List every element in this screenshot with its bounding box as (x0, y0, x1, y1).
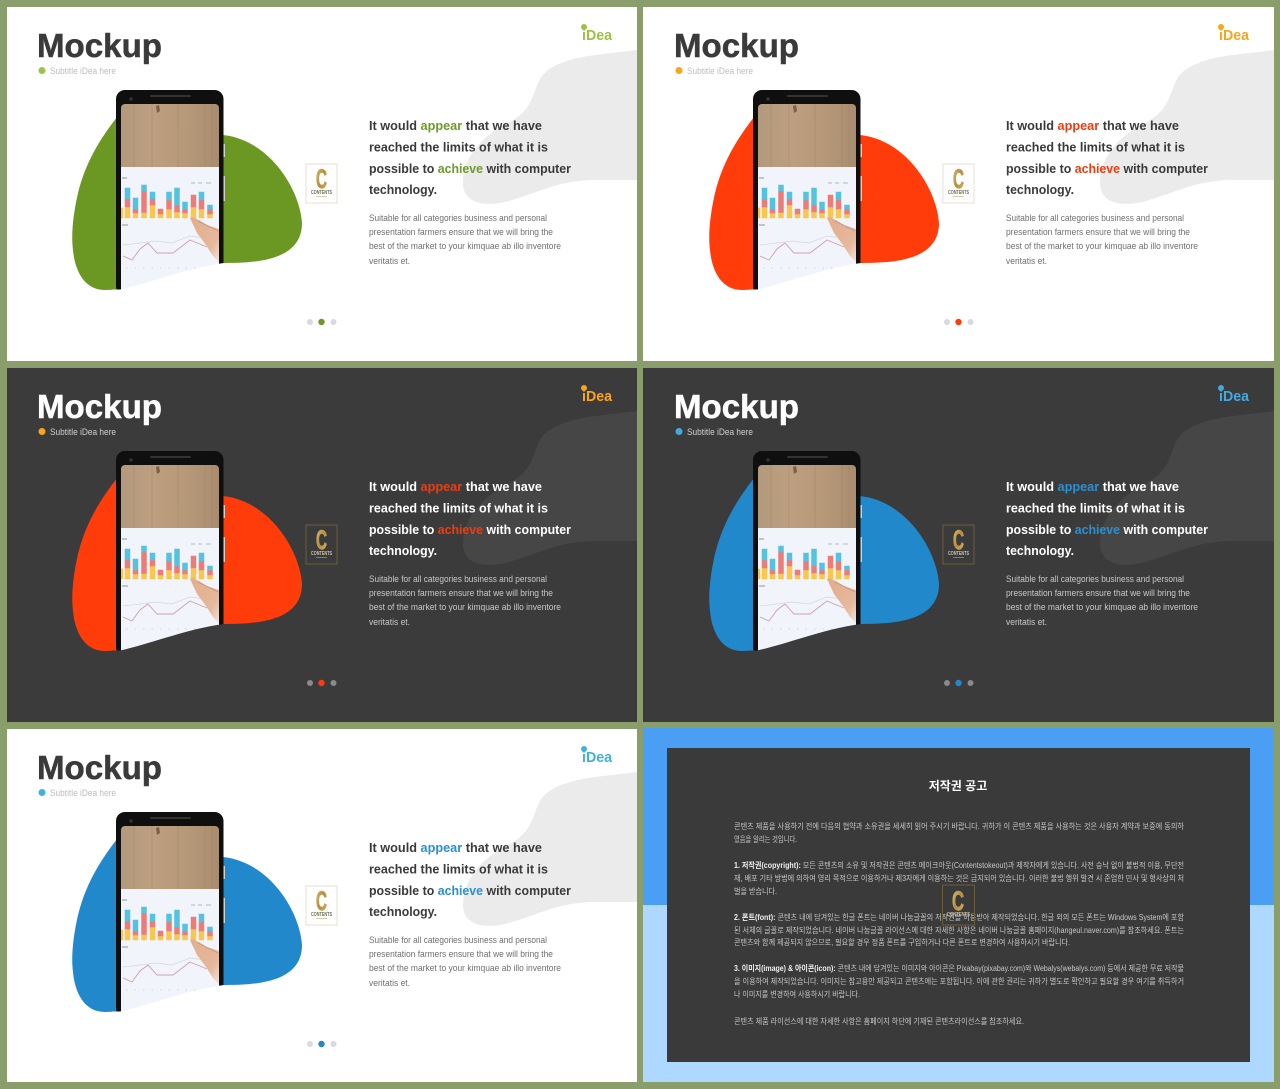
logo: iDea: iDea (1219, 388, 1250, 405)
body text: best of the market to your kimquae ab illo inventore (369, 963, 561, 973)
contents badge: CONTENTS (311, 551, 332, 557)
headline: technology. (369, 182, 437, 197)
contents badge: C (316, 886, 327, 916)
pagination dots (944, 680, 974, 686)
grey background blob (463, 411, 637, 565)
colored blob (72, 117, 302, 290)
notice section 2 font: 된 서체의 글꼴로 제작되었습니다. 네이버 나눔글꼴 라이선스에 대한 자세한 사항은 네이버 나눔글꼴 홈페이지(hangeul.naver.com)를 참조하세요. 폰트는 (734, 925, 1184, 935)
headline: possible to achieve with computer (369, 161, 571, 176)
contents badge watermark: C (952, 886, 964, 916)
headline: It would appear that we have (369, 479, 542, 494)
grey background blob (463, 772, 637, 926)
headline: reached the limits of what it is (369, 140, 548, 154)
body text (369, 213, 561, 266)
notice section 3 image and icon: 3. 이미지(image) & 아이콘(icon): 콘텐츠 내에 담겨있는 이미지와 아이콘은 Pixabay(pixabay.com)와 Webalys(webalys.com) 등에서 제공한 무료 저작물 (734, 963, 1184, 973)
colored blob (709, 478, 939, 651)
grey background blob (463, 50, 637, 204)
pagination dots (944, 319, 974, 325)
colored blob (72, 478, 302, 651)
notice section 2 font: 콘텐츠와 함께 제공되지 않으므로, 필요할 경우 정품 폰트를 구입하거나 다른 폰트로 변경하여 사용하시기 바랍니다. (734, 937, 1070, 947)
pagination dots (307, 680, 336, 686)
dark swoosh (112, 624, 224, 661)
body text: Suitable for all categories business and personal (1006, 574, 1184, 584)
headline: technology. (369, 543, 437, 558)
grey background blob (1100, 50, 1274, 204)
white swoosh (749, 263, 861, 300)
title: Mockup (674, 388, 799, 425)
notice closing line: 콘텐츠 제품 라이선스에 대한 자세한 사항은 홈페이지 하단에 기재된 콘텐츠라이선스를 참조하세요. (734, 1016, 1024, 1026)
headline: It would appear that we have (1006, 479, 1179, 494)
notice section 3 image and icon: 을 이용하여 제작되었습니다. 이미지는 참고용만 제공되고 콘텐츠에는 포함됩니다. 이에 관한 권리는 귀하가 별도로 확인하고 필요할 경우 여기를 취득하거 (734, 976, 1184, 986)
body text: veritatis et. (1006, 256, 1047, 266)
headline: technology. (1006, 543, 1074, 558)
notice section 1 copyright: 재, 배포 기타 방법에 의하여 영리 목적으로 이용하거나 제3자에게 이용하는 것은 금지되어 있습니다. 이러한 불법 행위 발견 시 준엄한 민사 및 형사상의 처 (734, 873, 1184, 883)
body text: Suitable for all categories business and personal (369, 935, 547, 945)
body text: Suitable for all categories business and personal (1006, 213, 1184, 223)
headline (369, 840, 571, 919)
headline: possible to achieve with computer (369, 883, 571, 898)
white swoosh (112, 985, 224, 1022)
notice title: 저작권 공고 (929, 778, 987, 793)
panel: mockup slide, green on white (7, 7, 637, 361)
headline: It would appear that we have (1006, 118, 1179, 133)
headline: reached the limits of what it is (369, 500, 548, 516)
notice section 2 font (734, 912, 1185, 947)
headline: reached the limits of what it is (1006, 140, 1185, 154)
contents badge: CONTENTS (948, 190, 969, 196)
panel: mockup slide, blue on dark (643, 368, 1274, 722)
body text (369, 935, 561, 988)
title: Mockup (37, 749, 162, 786)
contents badge watermark: CONTENTS (947, 912, 970, 918)
logo: iDea: iDea (582, 27, 613, 44)
body text: best of the market to your kimquae ab illo inventore (1006, 602, 1198, 612)
notice section 3 image and icon: 나 이미지를 변경하여 사용하시기 바랍니다. (734, 989, 860, 999)
subtitle: Subtitle iDea here (687, 66, 753, 76)
subtitle: Subtitle iDea here (687, 427, 753, 437)
notice section 1 copyright: 벌을 받습니다. (734, 886, 777, 896)
contents badge watermark (942, 885, 974, 925)
body text (1006, 213, 1198, 266)
contents badge: CONTENTS (311, 190, 332, 196)
body text: veritatis et. (369, 978, 410, 988)
notice section 1 copyright: 1. 저작권(copyright): 모든 콘텐츠의 소유 및 저작권은 콘텐츠 메이크아웃(Contentstokeout)과 제작자에게 있습니다. 사전 승낙 없이 불법적 이용, 무단전 (734, 860, 1184, 870)
headline: It would appear that we have (369, 840, 542, 855)
panel: mockup slide, blue on white (7, 729, 637, 1082)
headline: technology. (1006, 182, 1074, 197)
title: Mockup (37, 27, 162, 64)
notice section 2 font: 2. 폰트(font): 콘텐츠 내에 담겨있는 한글 폰트는 네이버 나눔글꼴의 저작권을 허용받아 제작되었습니다. 한글 외의 모든 폰트는 Windows System에 포함 (734, 912, 1185, 922)
body text: veritatis et. (1006, 617, 1047, 627)
headline (369, 479, 571, 558)
pagination dots (307, 1041, 336, 1047)
grey background blob (1100, 411, 1274, 565)
subtitle: Subtitle iDea here (50, 427, 116, 437)
body text: veritatis et. (369, 617, 410, 627)
body text: presentation farmers ensure that we will bring the (369, 949, 553, 959)
contents badge (943, 164, 974, 203)
title: Mockup (37, 388, 162, 425)
pagination dots (307, 319, 336, 325)
body text: veritatis et. (369, 256, 410, 266)
subtitle: Subtitle iDea here (50, 788, 116, 798)
logo: iDea: iDea (582, 388, 613, 405)
headline: It would appear that we have (369, 118, 542, 133)
headline: technology. (369, 904, 437, 919)
body text: best of the market to your kimquae ab illo inventore (369, 241, 561, 251)
body text: presentation farmers ensure that we will bring the (369, 227, 553, 237)
contents badge: CONTENTS (948, 551, 969, 557)
panel: mockup slide, red on white (643, 7, 1274, 361)
notice section 1 copyright (734, 860, 1184, 896)
body text (1006, 574, 1198, 627)
body text: Suitable for all categories business and personal (369, 574, 547, 584)
notice intro (734, 821, 1185, 844)
colored blob (72, 839, 302, 1012)
phone mockup (753, 451, 862, 658)
logo: iDea: iDea (582, 749, 613, 766)
title: Mockup (674, 27, 799, 64)
contents badge (306, 525, 337, 564)
body text: presentation farmers ensure that we will bring the (1006, 588, 1190, 598)
panel: mockup slide, red on dark (7, 368, 637, 722)
body text: best of the market to your kimquae ab illo inventore (369, 602, 561, 612)
contents badge (943, 525, 974, 564)
notice intro: 콘텐츠 제품을 사용하기 전에 다음의 협약과 소유권을 세세히 읽어 주시기 바랍니다. 귀하가 이 콘텐츠 제품을 사용하는 것은 사용자 계약과 보증에 동의하 (734, 821, 1185, 831)
contents badge: C (953, 525, 964, 555)
contents badge: C (316, 164, 327, 194)
notice dark card (667, 748, 1250, 1062)
subtitle: Subtitle iDea here (50, 66, 116, 76)
notice section 3 image and icon (734, 963, 1184, 999)
headline: reached the limits of what it is (1006, 500, 1185, 516)
headline: possible to achieve with computer (369, 522, 571, 537)
contents badge: C (316, 525, 327, 555)
contents badge: CONTENTS (311, 912, 332, 918)
headline (369, 118, 571, 197)
headline (1006, 479, 1208, 558)
contents badge: C (953, 164, 964, 194)
headline: reached the limits of what it is (369, 862, 548, 876)
dark swoosh (749, 624, 861, 661)
body text: Suitable for all categories business and personal (369, 213, 547, 223)
phone mockup (753, 90, 862, 297)
contents badge (306, 164, 337, 203)
body text: presentation farmers ensure that we will bring the (369, 588, 553, 598)
body text (369, 574, 561, 627)
panel: copyright notice (643, 728, 1274, 1082)
white swoosh (112, 263, 224, 300)
body text: best of the market to your kimquae ab illo inventore (1006, 241, 1198, 251)
headline: possible to achieve with computer (1006, 161, 1208, 176)
phone mockup (116, 451, 225, 658)
body text: presentation farmers ensure that we will bring the (1006, 227, 1190, 237)
headline: possible to achieve with computer (1006, 522, 1208, 537)
colored blob (709, 117, 939, 290)
headline (1006, 118, 1208, 197)
phone mockup (116, 90, 225, 297)
phone mockup (116, 812, 225, 1019)
notice intro: 였음을 알리는 것입니다. (734, 834, 797, 844)
logo: iDea: iDea (1219, 27, 1250, 44)
contents badge (306, 886, 337, 925)
